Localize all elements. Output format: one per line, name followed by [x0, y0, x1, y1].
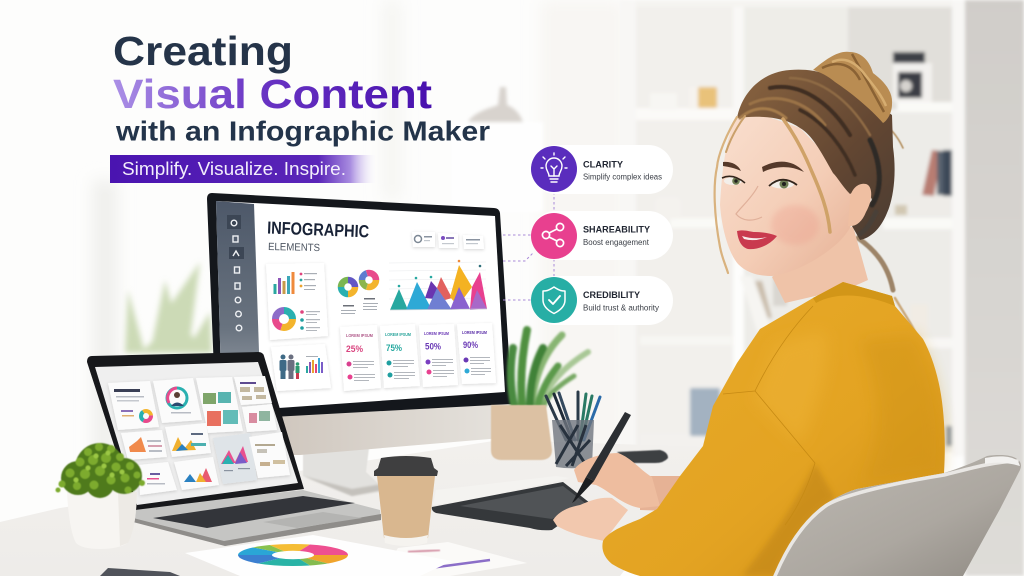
callout: clarity: CLARITY: [583, 160, 624, 170]
title line 3: with an Infographic Maker: [115, 116, 490, 146]
stat card: 50%: LOREM IPSUM: [424, 331, 449, 337]
cheek blush: [771, 205, 819, 245]
area chart: [389, 260, 487, 310]
laptop thumbnails: [108, 376, 290, 495]
ponytail wisps: [858, 120, 915, 332]
title line 2: Visual Content: [113, 71, 432, 117]
terracotta pot: [491, 405, 552, 460]
trackpad: [263, 512, 362, 528]
bookshelf recesses: [620, 0, 636, 450]
icon: light bulb: [531, 146, 577, 192]
stat card: 25%: 25%: [346, 344, 363, 355]
monitor bezel: [207, 193, 512, 420]
woman: [553, 52, 1021, 576]
stat card: 50%: 50%: [425, 342, 441, 352]
printed report with color wheel: [100, 535, 527, 576]
ear: [848, 184, 871, 226]
callout: credibility: CREDIBILITY: [583, 290, 641, 301]
shelves: [636, 108, 733, 120]
stat card: 25%: [340, 325, 381, 391]
stat card: 75%: [380, 324, 420, 388]
mini stat cards: [412, 232, 484, 249]
forearm and hands: [553, 453, 705, 541]
monitor screen: [216, 201, 505, 412]
callout: shareability: Boost engagement: [583, 238, 650, 247]
sidebar: [216, 201, 261, 412]
bar chart: [274, 272, 294, 294]
eyebrows: [723, 162, 804, 172]
laptop: [87, 352, 381, 546]
hair streaks: [740, 78, 879, 234]
callout: shareability: SHAREABILITY: [583, 224, 651, 236]
sidebar icons: [227, 215, 244, 331]
neck: [772, 226, 868, 303]
tagline band: Simplify. Visualize. Inspire.: [122, 158, 346, 179]
donut chart: [276, 310, 292, 328]
hair: [715, 70, 895, 273]
icon: shield: [531, 277, 577, 323]
plant behind monitor: [511, 330, 588, 405]
callout: shareability: [531, 211, 673, 260]
stat card: 90%: LOREM IPSUM: [462, 330, 487, 336]
left chart card: [266, 263, 328, 340]
eyes: [722, 176, 797, 188]
monitor heading: INFOGRAPHIC: [267, 218, 370, 241]
drawing tablet: [432, 476, 590, 530]
callout: clarity: [531, 145, 673, 194]
callout: credibility: Build trust & authority: [583, 304, 659, 312]
people card: [271, 344, 331, 391]
stat card: 90%: [457, 323, 496, 384]
laptop lid: [87, 352, 304, 510]
center donut charts: [341, 273, 378, 314]
monitor: [207, 193, 513, 496]
color wheel: [255, 547, 331, 563]
phone: [617, 450, 668, 463]
stat card: 75%: 75%: [386, 343, 402, 354]
callout: clarity: Simplify complex ideas: [583, 172, 662, 182]
title line 1: Creating: [113, 28, 293, 74]
pencil holder: [546, 392, 600, 468]
stylus: [572, 412, 631, 503]
coffee cup: [374, 456, 438, 546]
hair bun: [813, 52, 892, 123]
stat card: 90%: 90%: [463, 340, 478, 351]
icon: share: [531, 213, 577, 259]
keyboard: [153, 496, 355, 528]
sweater shading and seams: [723, 282, 941, 576]
face: [720, 114, 860, 276]
stat card: 25%: LOREM IPSUM: [346, 333, 373, 339]
dotted connectors: [503, 192, 554, 300]
shelf objects: [650, 93, 677, 110]
monitor stand: [303, 440, 386, 496]
monitor chin: [212, 402, 513, 455]
lamp: [468, 87, 523, 122]
stat card: 75%: LOREM IPSUM: [385, 332, 411, 338]
nose: [736, 186, 762, 220]
blond side strands: [715, 116, 830, 273]
smile: [737, 230, 777, 249]
desk: [0, 440, 704, 576]
sweater: [602, 282, 945, 576]
laptop base: [133, 490, 381, 546]
callout: credibility: [531, 276, 673, 325]
blurred window plant: [125, 262, 212, 353]
chair: [775, 455, 1021, 576]
laptop screen: [95, 362, 298, 505]
tagline band: [110, 155, 377, 183]
stat card: 50%: [419, 324, 458, 387]
monitor heading: [267, 218, 370, 254]
left potted plant: [56, 443, 145, 549]
monitor heading: ELEMENTS: [268, 241, 320, 254]
title: [113, 28, 490, 146]
